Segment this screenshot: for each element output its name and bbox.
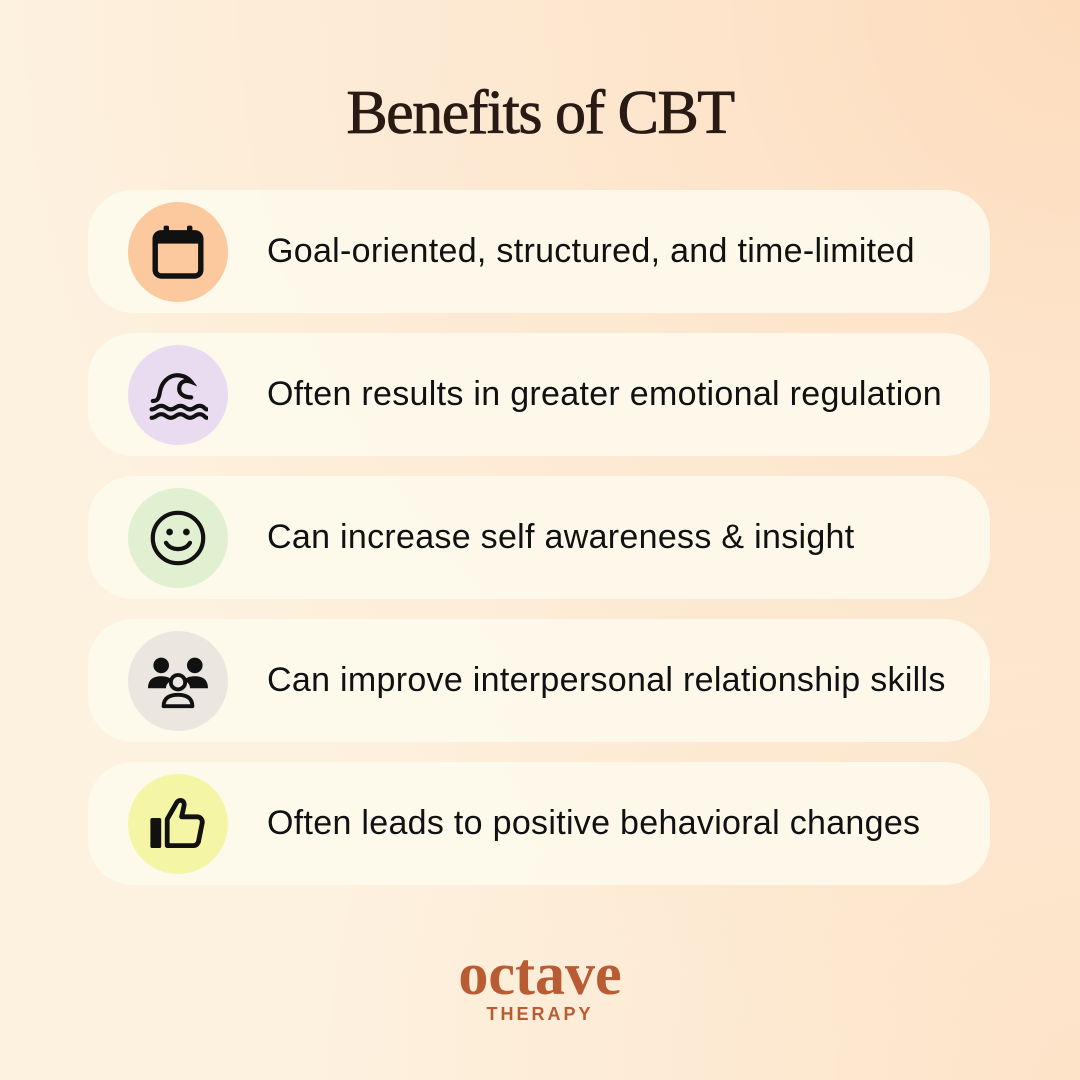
card: relationships	[88, 619, 990, 742]
text: Can improve interpersonal relationship skills	[267, 661, 946, 699]
text: Often leads to positive behavioral changes	[267, 804, 920, 842]
icon: calendar	[128, 202, 228, 302]
card: goal-oriented	[88, 190, 990, 313]
text: Goal-oriented, structured, and time-limited	[267, 232, 915, 270]
logo: octave	[458, 941, 622, 1007]
title: Benefits of CBT	[346, 79, 734, 147]
card: behavioral changes	[88, 762, 990, 885]
card: emotional regulation	[88, 333, 990, 456]
icon: thumbs up	[128, 774, 228, 874]
icon: group	[128, 631, 228, 731]
icon: smiley	[128, 488, 228, 588]
icon: wave	[128, 345, 228, 445]
logo: THERAPY	[486, 1004, 594, 1024]
card: self awareness	[88, 476, 990, 599]
text: Often results in greater emotional regulation	[267, 375, 942, 413]
text: Can increase self awareness & insight	[267, 518, 855, 556]
